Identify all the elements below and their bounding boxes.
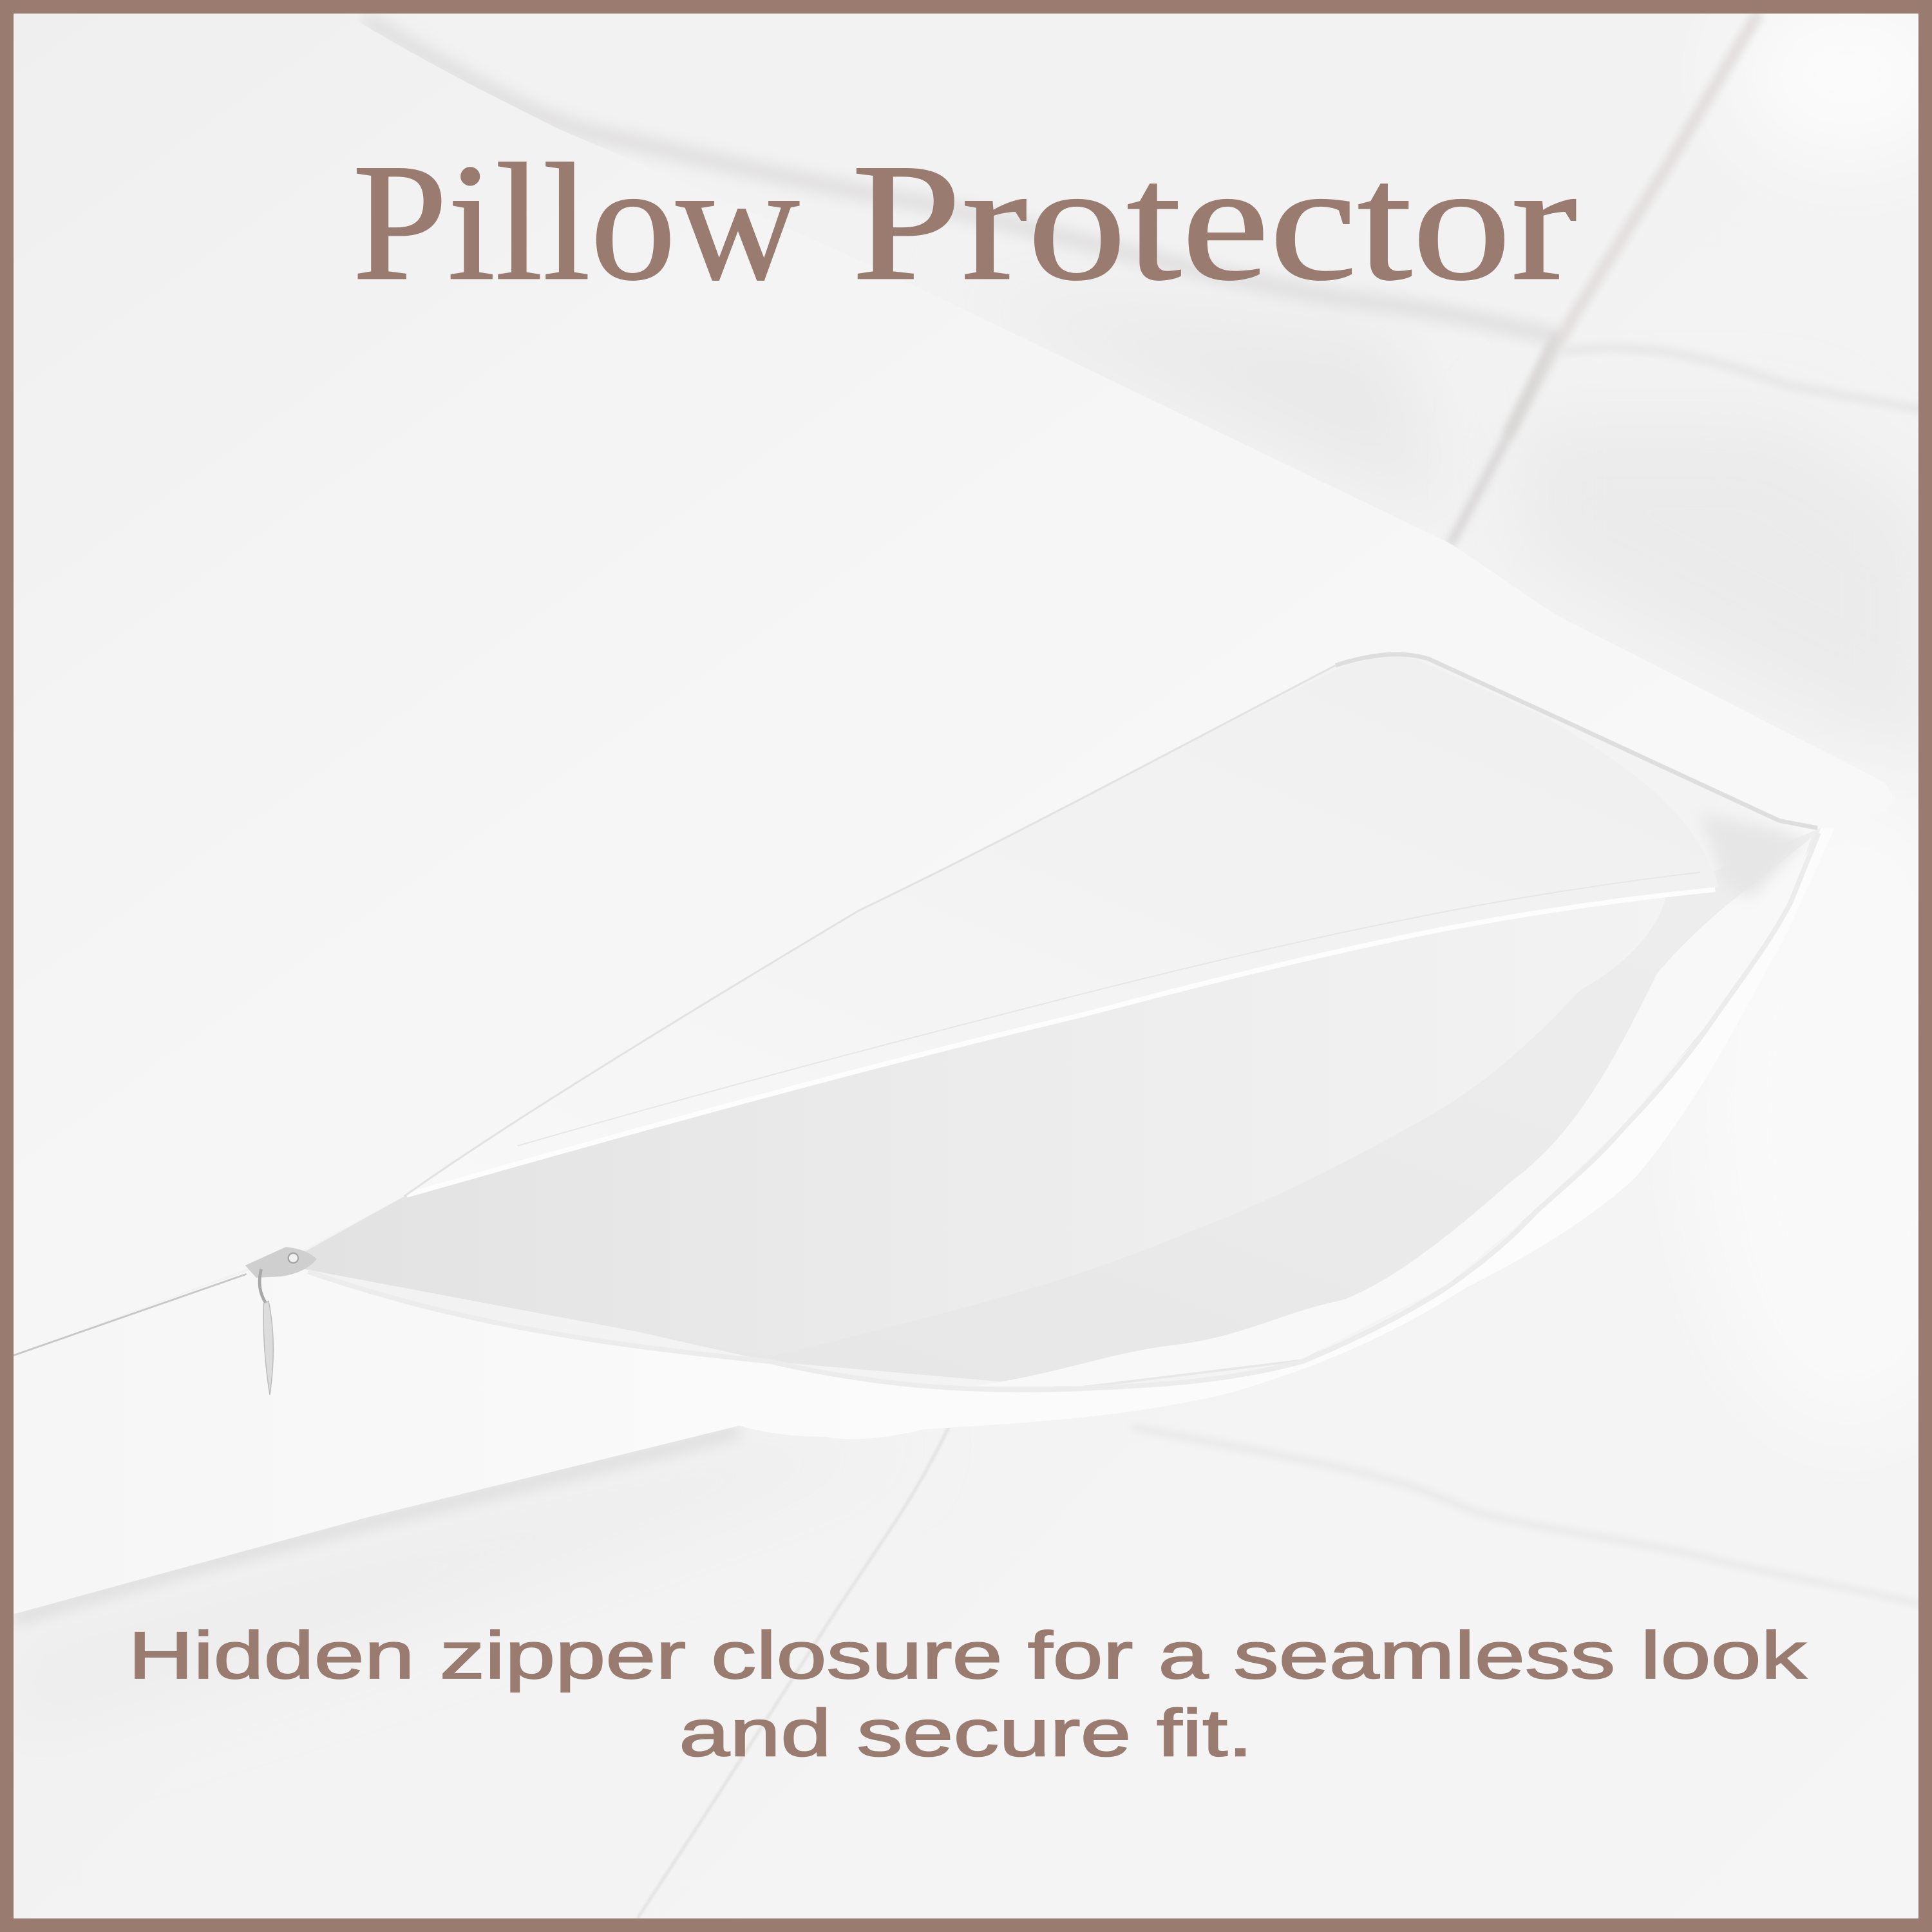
lower zipper track [308, 833, 1819, 1390]
title: Protector [851, 129, 1577, 315]
cavity under the opening [305, 828, 1821, 1388]
upper pillow panel [14, 14, 1892, 1356]
top zipper track [1336, 654, 1817, 828]
lining hem edge [406, 889, 1715, 1195]
lining stitch line [518, 873, 1700, 1146]
pillow protector inner lining [404, 653, 1719, 1197]
caption text block [128, 1618, 1806, 1770]
caption text block: and secure fit. [679, 1695, 1253, 1770]
closed zipper seam [404, 665, 1336, 1197]
shadow in the pillow corner [1700, 813, 1805, 900]
icon: zipper slider and pull tab [245, 1247, 317, 1395]
caption text block: Hidden zipper closure for a seamless look [128, 1618, 1806, 1692]
title: Pillow [352, 129, 800, 315]
zipper bottom edge crease [14, 1274, 247, 1356]
zipper mesh tape with wavy edge [973, 838, 1811, 1386]
inner pillow fabric [305, 889, 1669, 1357]
lower zipper flap [14, 828, 1835, 1614]
soft shadow below pillow [14, 1430, 739, 1619]
comforter stitched seams [370, 17, 1920, 1917]
title [352, 129, 1577, 315]
